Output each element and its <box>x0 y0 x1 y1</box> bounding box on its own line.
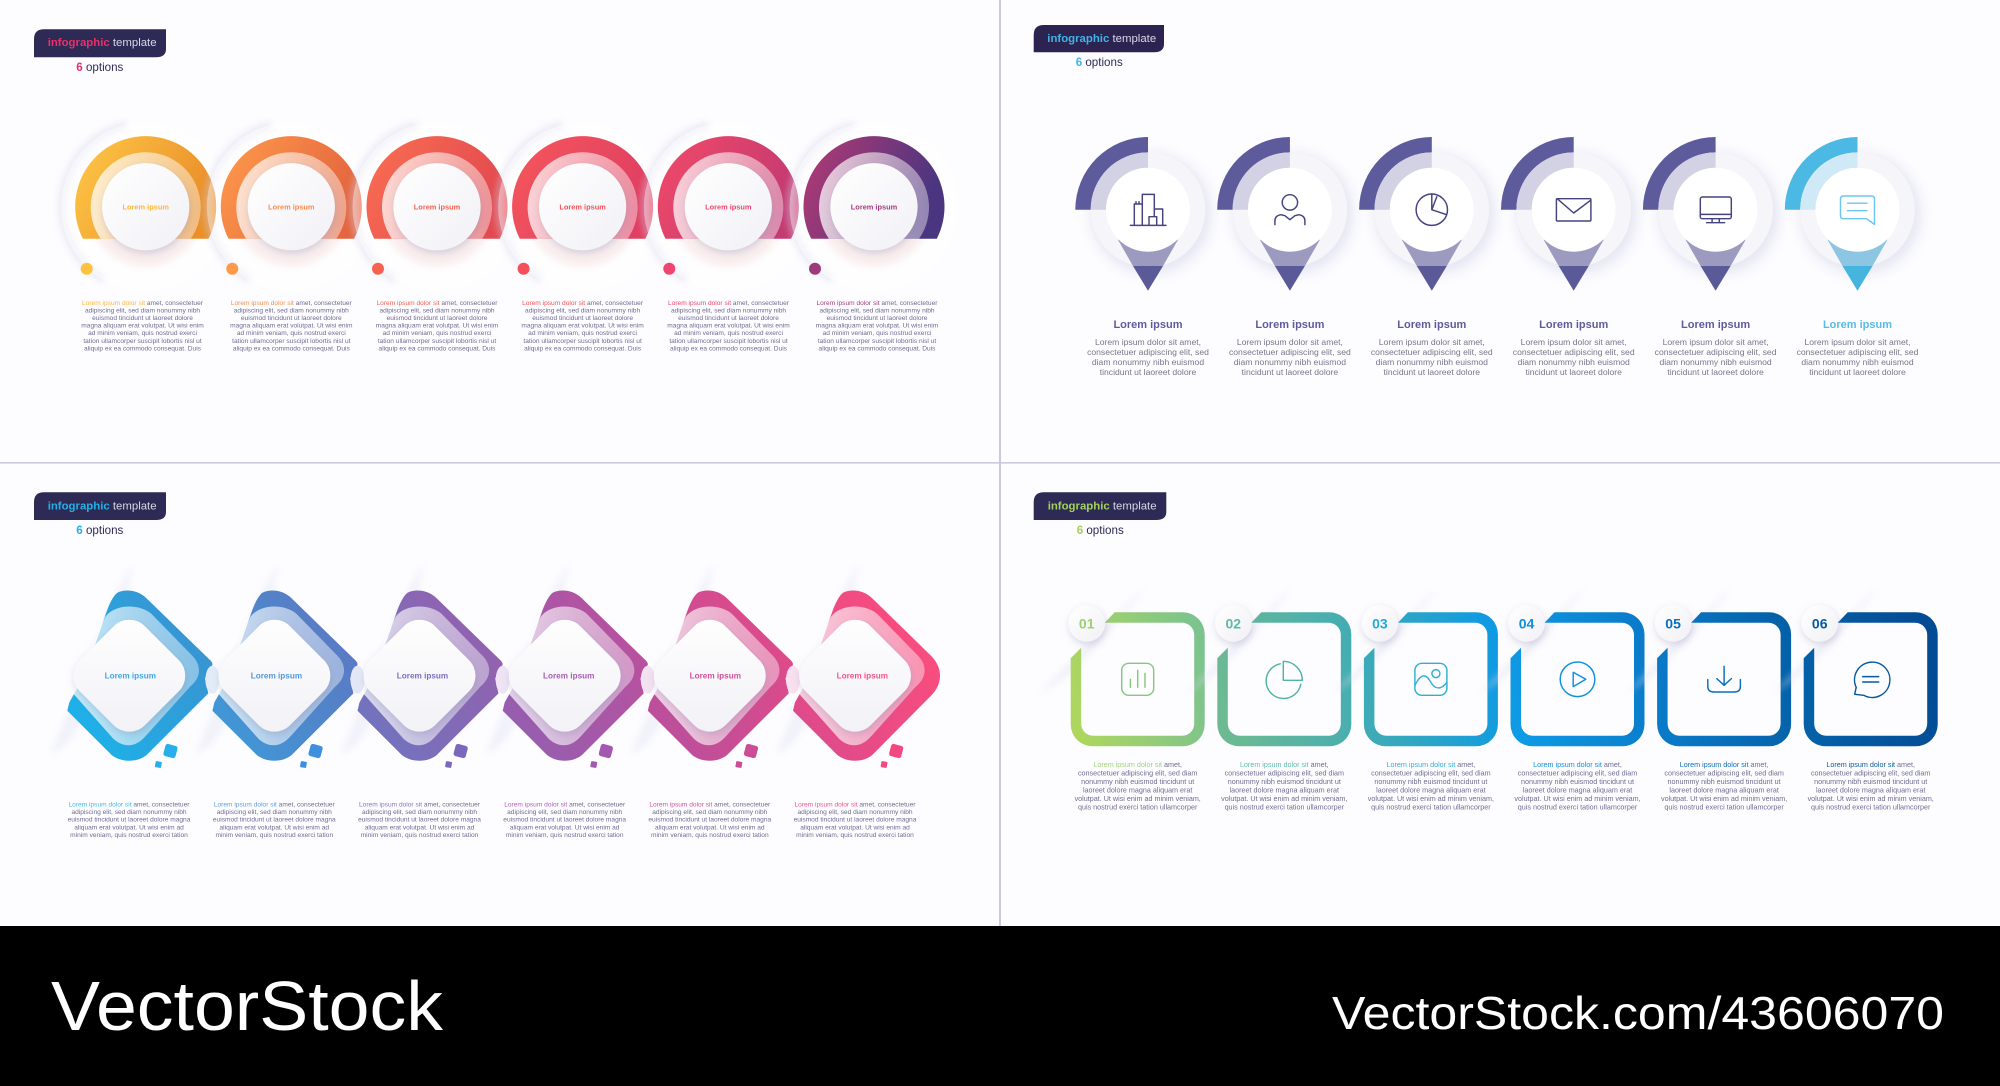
text block 6: consectetuer adipiscing elit, sed <box>1797 347 1919 357</box>
tag: infographic template <box>34 29 166 57</box>
text block 4: adipiscing elit, sed diam nonummy nibh <box>525 308 640 315</box>
text block 5: consectetuer adipiscing elit, sed <box>1655 347 1777 357</box>
diamond step 3 <box>340 564 503 768</box>
pin 5 with monitor icon <box>1643 137 1780 291</box>
text block 2: Lorem ipsum dolor sit amet, consectetuer <box>231 300 352 307</box>
text block 6: aliquam erat volutpat. Ut wisi enim ad <box>800 824 910 831</box>
text block 2 <box>1229 319 1351 377</box>
tag: infographic template <box>34 492 166 520</box>
text block 1: ad minim veniam, quis nostrud exerci <box>88 330 197 337</box>
text block 6: aliquip ex ea commodo consequat. Duis <box>819 345 936 352</box>
text block 5 <box>1655 319 1777 377</box>
diamond step 3: Lorem ipsum <box>397 672 448 681</box>
text block 3: euismod tincidunt ut laoreet dolore <box>387 315 488 322</box>
step 6 circle <box>790 122 958 291</box>
diamond step 6 <box>776 564 940 768</box>
text block 4: diam nonummy nibh euismod <box>1518 357 1630 367</box>
text block 2: consectetuer adipiscing elit, sed <box>1229 347 1351 357</box>
step 3 circle: Lorem ipsum <box>414 202 461 211</box>
text block 1: laoreet dolore magna aliquam erat <box>1083 785 1192 794</box>
subtitle: 6 options: 6 options <box>1076 56 1123 69</box>
diamond step 6: Lorem ipsum <box>837 672 888 681</box>
text block 5: tation ullamcorper suscipit lobortis nisl ut <box>669 338 788 345</box>
text block 6: Lorem ipsum dolor sit amet, consectetuer <box>795 802 915 809</box>
text block 3: quis nostrud exerci tation ullamcorper <box>1371 802 1491 811</box>
text block 4 <box>1513 319 1635 377</box>
text block 3: Lorem ipsum <box>1397 319 1467 331</box>
text block 5: laoreet dolore magna aliquam erat <box>1669 785 1779 794</box>
text block 3: minim veniam, quis nostrud exerci tation <box>361 832 479 839</box>
text block 1: nonummy nibh euismod tincidunt ut <box>1081 777 1194 786</box>
square step 4 with play icon: 04 <box>1519 615 1534 631</box>
text block 2: laoreet dolore magna aliquam erat <box>1230 785 1339 794</box>
text block 1: Lorem ipsum <box>1113 319 1183 331</box>
text block 4: quis nostrud exerci tation ullamcorper <box>1518 802 1638 811</box>
text block 6: tation ullamcorper suscipit lobortis nisl ut <box>818 338 936 345</box>
text block 4: nonummy nibh euismod tincidunt ut <box>1521 777 1634 786</box>
text block 4: euismod tincidunt ut laoreet dolore magna <box>503 817 626 824</box>
text block 2: Lorem ipsum <box>1255 319 1325 331</box>
tag: infographic template: infographic template <box>48 37 157 49</box>
text block 5: adipiscing elit, sed diam nonummy nibh <box>671 308 786 315</box>
text block 2: volutpat. Ut wisi enim ad minim veniam, <box>1221 794 1347 803</box>
text block 4: consectetuer adipiscing elit, sed diam <box>1518 768 1637 778</box>
text block 6: magna aliquam erat volutpat. Ut wisi enim <box>816 323 939 330</box>
text block 4: Lorem ipsum <box>1539 319 1608 331</box>
text block 3: Lorem ipsum dolor sit amet, consectetuer <box>377 300 497 307</box>
text block 1: consectetuer adipiscing elit, sed <box>1087 347 1209 357</box>
text block 6: nonummy nibh euismod tincidunt ut <box>1814 777 1927 786</box>
text block 3: aliquam erat volutpat. Ut wisi enim ad <box>365 824 475 831</box>
text block 6: tincidunt ut laoreet dolore <box>1809 367 1906 377</box>
text block 6: Lorem ipsum <box>1823 319 1892 331</box>
square step 2 with pie icon <box>1186 585 1351 746</box>
text block 6: laoreet dolore magna aliquam erat <box>1816 785 1925 794</box>
text block 3: diam nonummy nibh euismod <box>1376 357 1488 367</box>
text block 4: aliquam erat volutpat. Ut wisi enim ad <box>510 824 620 831</box>
tag: infographic template <box>1034 492 1166 520</box>
text block 2: diam nonummy nibh euismod <box>1234 357 1346 367</box>
text block 6: Lorem ipsum dolor sit amet, <box>1804 337 1911 347</box>
text block 4: Lorem ipsum dolor sit amet, consectetuer <box>504 802 625 809</box>
step 5 circle: Lorem ipsum <box>705 202 752 211</box>
text block 6: diam nonummy nibh euismod <box>1801 357 1914 367</box>
text block 2: adipiscing elit, sed diam nonummy nibh <box>234 308 349 315</box>
square step 3 with picture icon <box>1333 585 1498 746</box>
text block 3: magna aliquam erat volutpat. Ut wisi enim <box>376 323 499 330</box>
text block 6: ad minim veniam, quis nostrud exerci <box>823 330 932 337</box>
text block 1: adipiscing elit, sed diam nonummy nibh <box>71 809 187 816</box>
diamond step 1: Lorem ipsum <box>105 672 156 681</box>
text block 5: magna aliquam erat volutpat. Ut wisi enim <box>667 323 790 330</box>
text block 4: tincidunt ut laoreet dolore <box>1525 367 1622 377</box>
text block 3: Lorem ipsum dolor sit amet, consectetuer <box>359 802 480 809</box>
text block 3: adipiscing elit, sed diam nonummy nibh <box>362 809 477 816</box>
image url text: VectorStock.com/43606070 <box>1332 987 1944 1039</box>
diamond step 5: Lorem ipsum <box>690 672 741 681</box>
text block 5: quis nostrud exerci tation ullamcorper <box>1664 802 1784 811</box>
text block 2: euismod tincidunt ut laoreet dolore <box>241 315 342 322</box>
step 1 circle <box>61 122 230 291</box>
text block 3: tation ullamcorper suscipit lobortis nisl ut <box>378 338 496 345</box>
text block 4: ad minim veniam, quis nostrud exerci <box>528 330 638 337</box>
text block 5: nonummy nibh euismod tincidunt ut <box>1668 777 1781 786</box>
step 5 circle <box>644 122 813 291</box>
square step 3 with picture icon: 03 <box>1372 615 1388 631</box>
pin 3 with pie chart icon <box>1359 137 1496 291</box>
step 4 circle <box>498 122 667 291</box>
text block 6: euismod tincidunt ut laoreet dolore magna <box>794 817 917 824</box>
text block 2: Lorem ipsum dolor sit amet, <box>1237 337 1343 347</box>
panel: rounded squares infographic <box>1034 492 1938 811</box>
text block 3: tincidunt ut laoreet dolore <box>1384 367 1480 377</box>
text block 1: diam nonummy nibh euismod <box>1092 357 1204 367</box>
step 1 circle: Lorem ipsum <box>122 202 169 211</box>
text block 5: ad minim veniam, quis nostrud exerci <box>674 330 783 337</box>
step 2 circle: Lorem ipsum <box>268 202 315 211</box>
square step 1 with bar chart icon <box>1040 585 1205 746</box>
text block 2: nonummy nibh euismod tincidunt ut <box>1228 777 1341 786</box>
diamond step 1 <box>50 564 212 768</box>
text block 1: tincidunt ut laoreet dolore <box>1100 367 1196 377</box>
text block 6: euismod tincidunt ut laoreet dolore <box>827 315 928 322</box>
text block 5: minim veniam, quis nostrud exerci tation <box>651 832 769 839</box>
diamond step 4 <box>486 564 648 768</box>
text block 3: consectetuer adipiscing elit, sed <box>1371 347 1493 357</box>
square step 6 with chat icon: 06 <box>1812 615 1828 631</box>
step 3 circle <box>352 122 522 291</box>
text block 1: Lorem ipsum dolor sit amet, <box>1095 337 1201 347</box>
text block 5: euismod tincidunt ut laoreet dolore <box>678 315 779 322</box>
panel: rounded diamonds infographic <box>34 492 940 839</box>
text block 4: tation ullamcorper suscipit lobortis nisl ut <box>523 338 642 345</box>
step 4 circle: Lorem ipsum <box>559 202 606 211</box>
step 6 circle: Lorem ipsum <box>851 202 898 211</box>
text block 4: euismod tincidunt ut laoreet dolore <box>532 315 633 322</box>
text block 4: Lorem ipsum dolor sit amet, consectetuer <box>522 300 643 307</box>
text block 5: aliquip ex ea commodo consequat. Duis <box>670 345 788 352</box>
square step 4 with play icon <box>1480 585 1644 746</box>
text block 3: nonummy nibh euismod tincidunt ut <box>1374 777 1487 786</box>
step 2 circle <box>207 122 376 291</box>
subtitle: 6 options: 6 options <box>1077 524 1124 537</box>
square step 5 with download icon <box>1626 585 1791 746</box>
text block 2: Lorem ipsum dolor sit amet, consectetuer <box>214 802 335 809</box>
text block 5: tincidunt ut laoreet dolore <box>1667 367 1764 377</box>
text block 4: Lorem ipsum dolor sit amet, <box>1521 337 1627 347</box>
text block 4: volutpat. Ut wisi enim ad minim veniam, <box>1514 794 1641 803</box>
text block 6: Lorem ipsum dolor sit amet, <box>1826 760 1915 769</box>
text block 1: aliquip ex ea commodo consequat. Duis <box>84 345 202 352</box>
text block 4: aliquip ex ea commodo consequat. Duis <box>524 345 642 352</box>
tag: infographic template: infographic template <box>1048 500 1157 512</box>
text block 2: aliquip ex ea commodo consequat. Duis <box>233 345 350 352</box>
text block 5: Lorem ipsum dolor sit amet, consectetuer <box>668 300 789 307</box>
pin 6 with chat icon <box>1785 137 1922 291</box>
text block 1: euismod tincidunt ut laoreet dolore magna <box>68 817 191 824</box>
text block 3: volutpat. Ut wisi enim ad minim veniam, <box>1368 794 1494 803</box>
text block 1: minim veniam, quis nostrud exerci tation <box>70 832 188 839</box>
text block 1: volutpat. Ut wisi enim ad minim veniam, <box>1075 794 1201 803</box>
text block 6: quis nostrud exerci tation ullamcorper <box>1811 802 1931 811</box>
text block 3: aliquip ex ea commodo consequat. Duis <box>379 345 496 352</box>
timeline dots <box>81 263 821 275</box>
text block 5: Lorem ipsum <box>1681 319 1750 331</box>
text block 1: adipiscing elit, sed diam nonummy nibh <box>85 308 200 315</box>
diamond step 5 <box>631 564 793 768</box>
text block 2: tincidunt ut laoreet dolore <box>1242 367 1338 377</box>
pin 4 with mail icon <box>1501 137 1638 291</box>
text block 1 <box>1087 319 1209 377</box>
text block 4: consectetuer adipiscing elit, sed <box>1513 347 1635 357</box>
text block 6: adipiscing elit, sed diam nonummy nibh <box>819 308 935 315</box>
tag: infographic template <box>1034 25 1164 52</box>
text block 3: Lorem ipsum dolor sit amet, <box>1387 760 1475 769</box>
text block 2: minim veniam, quis nostrud exerci tation <box>215 832 333 839</box>
text block 2: tation ullamcorper suscipit lobortis nisl ut <box>232 338 351 345</box>
logo text: VectorStock <box>51 967 444 1045</box>
text block 3: consectetuer adipiscing elit, sed diam <box>1371 768 1491 778</box>
diamond step 2: Lorem ipsum <box>251 672 302 681</box>
text block 1: Lorem ipsum dolor sit amet, consectetuer <box>69 802 189 809</box>
text block 6: minim veniam, quis nostrud exerci tation <box>796 832 914 839</box>
text block 6: adipiscing elit, sed diam nonummy nibh <box>797 809 913 816</box>
text block 3: Lorem ipsum dolor sit amet, <box>1379 337 1485 347</box>
tag: infographic template: infographic template <box>1047 33 1156 45</box>
text block 2: consectetuer adipiscing elit, sed diam <box>1225 768 1344 778</box>
text block 2: aliquam erat volutpat. Ut wisi enim ad <box>220 824 329 831</box>
text block 2: adipiscing elit, sed diam nonummy nibh <box>217 809 332 816</box>
text block 2: euismod tincidunt ut laoreet dolore magna <box>213 817 336 824</box>
text block 5: aliquam erat volutpat. Ut wisi enim ad <box>655 824 765 831</box>
square step 5 with download icon: 05 <box>1665 615 1681 631</box>
text block 6: consectetuer adipiscing elit, sed diam <box>1811 768 1930 778</box>
text block 4: laoreet dolore magna aliquam erat <box>1523 785 1632 794</box>
pin 1 with buildings icon <box>1075 137 1212 291</box>
text block 4: magna aliquam erat volutpat. Ut wisi enim <box>521 323 644 330</box>
text block 1: consectetuer adipiscing elit, sed diam <box>1078 768 1197 778</box>
subtitle: 6 options: 6 options <box>76 524 124 537</box>
subtitle: 6 options: 6 options <box>76 61 124 74</box>
text block 1: aliquam erat volutpat. Ut wisi enim ad <box>74 824 184 831</box>
text block 2: magna aliquam erat volutpat. Ut wisi enim <box>230 323 353 330</box>
text block 2: quis nostrud exerci tation ullamcorper <box>1225 802 1345 811</box>
square step 6 with chat icon <box>1773 585 1938 746</box>
text block 5: euismod tincidunt ut laoreet dolore magna <box>648 817 772 824</box>
footer band <box>0 926 2000 1086</box>
text block 5: diam nonummy nibh euismod <box>1659 357 1772 367</box>
diamond step 2 <box>195 564 358 768</box>
pin 2 with person icon <box>1217 137 1354 291</box>
panel: map pins infographic <box>1034 25 1922 377</box>
text block 1: Lorem ipsum dolor sit amet, consectetuer <box>82 300 203 307</box>
text block 2: ad minim veniam, quis nostrud exerci <box>237 330 346 337</box>
text block 5: adipiscing elit, sed diam nonummy nibh <box>652 809 768 816</box>
text block 1: euismod tincidunt ut laoreet dolore <box>92 315 193 322</box>
text block 1: quis nostrud exerci tation ullamcorper <box>1078 802 1198 811</box>
text block 1: magna aliquam erat volutpat. Ut wisi enim <box>81 323 204 330</box>
text block 4: adipiscing elit, sed diam nonummy nibh <box>507 809 623 816</box>
square step 2 with pie icon: 02 <box>1226 615 1241 631</box>
text block 4: Lorem ipsum dolor sit amet, <box>1533 760 1622 769</box>
text block 3: ad minim veniam, quis nostrud exerci <box>383 330 492 337</box>
text block 5: consectetuer adipiscing elit, sed diam <box>1664 768 1784 778</box>
tag: infographic template: infographic template <box>48 500 157 512</box>
text block 5: Lorem ipsum dolor sit amet, <box>1663 337 1769 347</box>
text block 6: Lorem ipsum dolor sit amet, consectetuer <box>817 300 937 307</box>
text block 5: Lorem ipsum dolor sit amet, consectetuer <box>649 802 770 809</box>
square step 1 with bar chart icon: 01 <box>1079 615 1095 631</box>
text block 3: adipiscing elit, sed diam nonummy nibh <box>379 308 495 315</box>
diamond step 4: Lorem ipsum <box>543 672 594 681</box>
text block 2: Lorem ipsum dolor sit amet, <box>1240 760 1329 769</box>
text block 3 <box>1371 319 1493 377</box>
text block 5: volutpat. Ut wisi enim ad minim veniam, <box>1661 794 1787 803</box>
panel: circles infographic <box>34 29 958 352</box>
text block 4: minim veniam, quis nostrud exerci tation <box>506 832 624 839</box>
text block 6 <box>1797 319 1919 377</box>
text block 1: Lorem ipsum dolor sit amet, <box>1093 760 1182 769</box>
text block 6: volutpat. Ut wisi enim ad minim veniam, <box>1808 794 1934 803</box>
text block 1: tation ullamcorper suscipit lobortis nisl ut <box>83 338 202 345</box>
text block 3: laoreet dolore magna aliquam erat <box>1376 785 1486 794</box>
text block 3: euismod tincidunt ut laoreet dolore magna <box>358 817 481 824</box>
text block 5: Lorem ipsum dolor sit amet, <box>1680 760 1768 769</box>
